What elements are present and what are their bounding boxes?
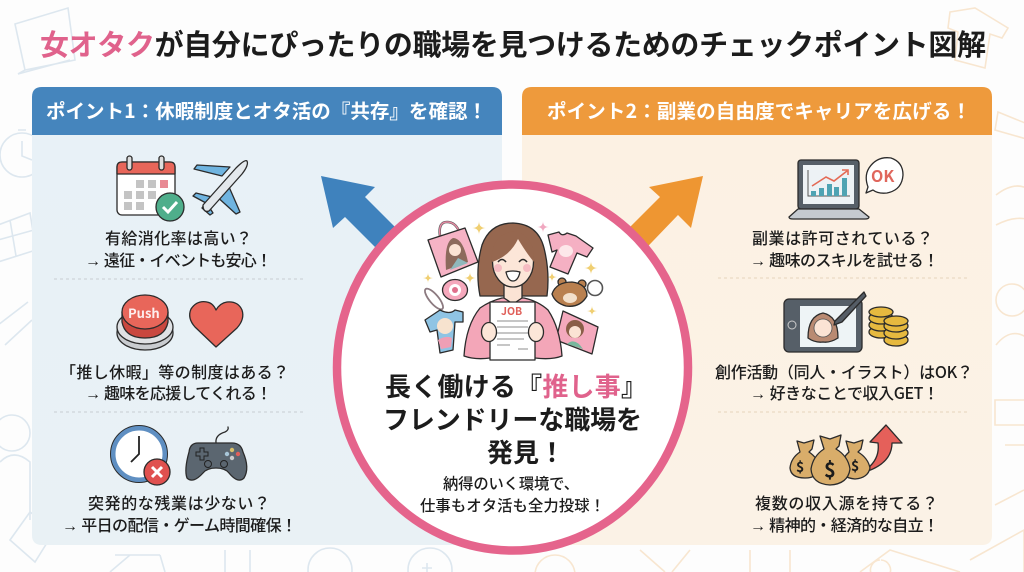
icon: pink t-shirt xyxy=(548,232,593,274)
text: overtime xyxy=(62,494,297,535)
icon: money bags: $ xyxy=(851,456,859,476)
arrow: to point 1 xyxy=(321,176,415,267)
text: paid leave: 有給消化率は高い？ xyxy=(105,230,252,248)
icon: coins xyxy=(869,307,908,346)
text: paid leave xyxy=(85,230,272,270)
header: point 2: ポイント2：副業の自由度でキャリアを広げる！ xyxy=(547,95,971,124)
text: side job allowed: → 趣味のスキルを試せる！ xyxy=(750,252,939,270)
text: side job allowed xyxy=(750,230,939,270)
heading: center message xyxy=(383,372,647,468)
text: oshi leave: 「推し休暇」等の制度はある？ xyxy=(60,364,289,382)
text: creative work xyxy=(715,359,973,404)
icon: lanyard xyxy=(422,286,446,312)
text: multiple income xyxy=(750,495,939,535)
panel: point 1 xyxy=(32,87,502,545)
icon: airplane xyxy=(193,161,247,215)
header: point 2 xyxy=(522,87,992,135)
icon: sparkles xyxy=(423,221,598,316)
icon: OK speech bubble: OK xyxy=(871,163,895,187)
text: center subcopy: 仕事もオタ活も全力投球！ xyxy=(420,498,605,515)
text: side job allowed: 副業は許可されている？ xyxy=(752,230,933,248)
panel: point 2 xyxy=(522,87,992,545)
icon: calendar with check xyxy=(117,156,184,221)
text: multiple income: 複数の収入源を持てる？ xyxy=(755,495,938,513)
heading: center message: 長く働ける『推し事』 xyxy=(385,372,647,402)
icon: tote bag xyxy=(428,222,478,277)
icon: badge xyxy=(442,280,468,300)
heading: center message: フレンドリーな職場を xyxy=(383,405,642,435)
icon: push button: Push xyxy=(128,303,160,322)
icon: clock with x xyxy=(110,426,170,485)
icon: money bags: $ xyxy=(796,457,804,477)
header: point 1 xyxy=(32,87,502,135)
illustration: woman holding job sheet: JOB xyxy=(501,304,522,319)
background line icons: left side xyxy=(0,8,452,572)
icon: bear charm xyxy=(552,278,602,306)
icon: push button xyxy=(117,295,173,350)
text: center subcopy: 納得のいく環境で、 xyxy=(443,476,579,493)
heading: center message: 発見！ xyxy=(487,438,565,468)
text: oshi leave xyxy=(60,364,289,403)
icon: photo card xyxy=(556,311,598,354)
icon: laptop with chart xyxy=(789,160,869,219)
background line icons: right side xyxy=(535,8,1024,572)
icon: heart xyxy=(190,302,243,347)
text: oshi leave: → 趣味を応援してくれる！ xyxy=(85,385,272,403)
header: point 1: ポイント1：休暇制度とオタ活の『共存』を確認！ xyxy=(46,95,487,124)
center circle xyxy=(337,184,688,550)
illustration: merchandise around woman xyxy=(422,221,602,360)
icon: pen tablet xyxy=(784,292,866,352)
illustration: woman holding job sheet xyxy=(464,223,562,360)
icon: OK speech bubble xyxy=(866,158,903,193)
text: creative work: → 好きなことで収入GET！ xyxy=(750,380,939,404)
icon: game controller xyxy=(186,427,247,480)
icon: money bags: $ xyxy=(824,454,836,483)
text: overtime: 突発的な残業は少ない？ xyxy=(88,494,270,513)
icon: blue t-shirt xyxy=(425,310,463,353)
title: 女オタクが自分にぴったりの職場を見つけるためのチェックポイント図解 xyxy=(40,28,986,62)
icon: upward arrow xyxy=(868,425,902,471)
text: creative work: 創作活動（同人・イラスト）はOK？ xyxy=(715,359,973,383)
icon: money bags xyxy=(790,435,870,485)
text: paid leave: → 遠征・イベントも安心！ xyxy=(85,252,272,270)
text: overtime: → 平日の配信・ゲーム時間確保！ xyxy=(62,517,297,535)
text: multiple income: → 精神的・経済的な自立！ xyxy=(750,517,939,535)
text: center subcopy xyxy=(420,476,605,515)
arrow: to point 2 xyxy=(610,176,703,267)
